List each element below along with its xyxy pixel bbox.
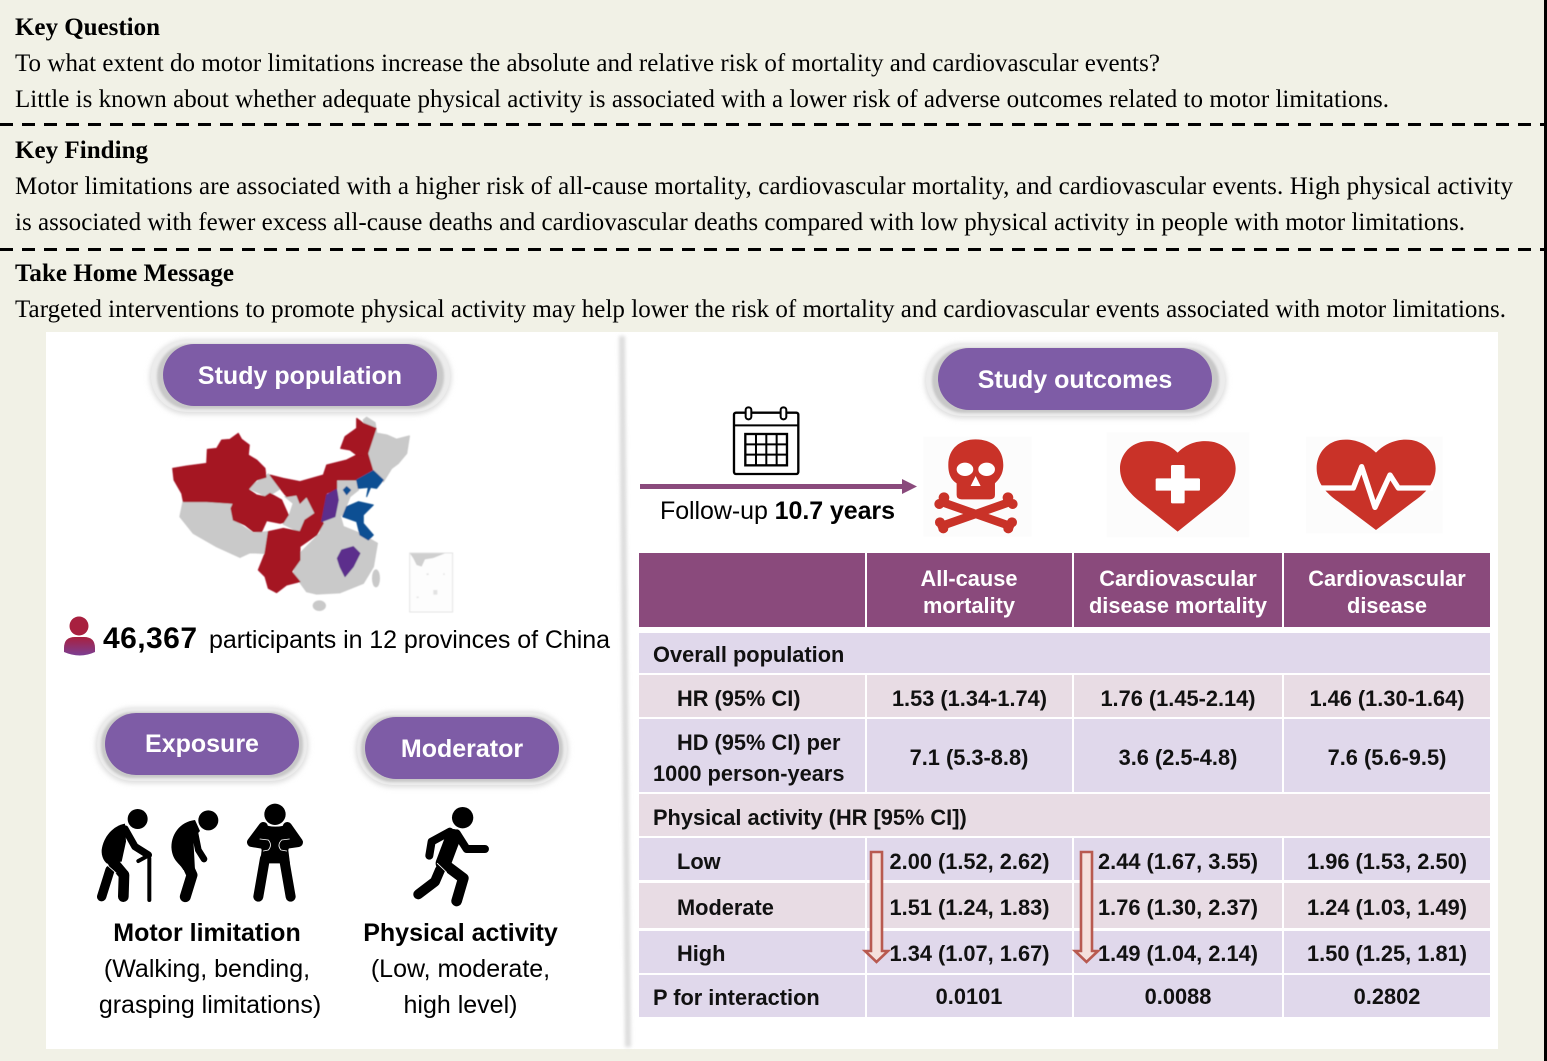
text: grasping limitations: grasping limitations) [99, 991, 321, 1019]
table: outcomes [639, 553, 1490, 1017]
row: HD: 1000 person-years [653, 761, 844, 786]
icon: heart with cross [1107, 432, 1249, 537]
participants description: participants in 12 provinces of China [209, 626, 610, 654]
row: high: High [677, 941, 725, 966]
heading: take home message: Take Home Message [15, 260, 234, 287]
row: HD: 7.1 (5.3-8.8) [910, 745, 1028, 770]
row: overall population [639, 633, 1490, 673]
row: HR [639, 675, 1490, 717]
icon: older people with motor limitations [102, 804, 298, 900]
row: moderate: Moderate [677, 895, 774, 920]
panel: study outcomes [639, 344, 1490, 1017]
row: physical activity heading: Physical activity (HR [95% CI]) [653, 805, 967, 830]
table header: disease mortality [1089, 593, 1267, 618]
row: HD: HD (95% CI) per [677, 730, 841, 755]
row: HR: HR (95% CI) [677, 686, 801, 711]
row: moderate: 1.51 (1.24, 1.83) [890, 895, 1049, 920]
pill: exposure: Exposure [145, 730, 259, 758]
row: overall population: Overall population [653, 642, 844, 667]
table header: mortality [923, 593, 1015, 618]
row: low: Low [677, 849, 721, 874]
pill: study population: Study population [198, 362, 402, 390]
row: high [639, 931, 1490, 973]
table header: All-cause [921, 566, 1017, 591]
label: physical activity: Physical activity [363, 919, 558, 947]
table header: Cardiovascular [1308, 566, 1466, 591]
heading: key question: Key Question [15, 14, 160, 41]
panel: exposure [96, 708, 321, 1019]
row: high: 1.34 (1.07, 1.67) [890, 941, 1049, 966]
row: HD [639, 719, 1490, 792]
section: take home message [15, 260, 1506, 323]
row: p for interaction: P for interaction [653, 985, 820, 1010]
row: p for interaction: 0.0088 [1145, 984, 1211, 1009]
row: high: 1.49 (1.04, 2.14) [1098, 941, 1258, 966]
pill: moderator: Moderator [401, 735, 523, 763]
panel: moderator [356, 712, 568, 1019]
row: low: 1.96 (1.53, 2.50) [1307, 849, 1467, 874]
row: moderate: 1.24 (1.03, 1.49) [1307, 895, 1467, 920]
icon: skull and crossbones [923, 437, 1032, 537]
participants count: 46,367 [103, 622, 197, 655]
row: HR: 1.46 (1.30-1.64) [1309, 686, 1465, 711]
map of China [173, 417, 453, 612]
section: key finding [15, 137, 1514, 236]
label: motor limitation: Motor limitation [113, 919, 301, 947]
icon: heart with pulse [1306, 437, 1443, 533]
row: low: 2.00 (1.52, 2.62) [890, 849, 1049, 874]
pill: study outcomes [925, 344, 1226, 418]
icon: runner [418, 807, 485, 901]
row: high: 1.50 (1.25, 1.81) [1307, 941, 1467, 966]
text: low, moderate: (Low, moderate, [371, 955, 550, 983]
table header [639, 553, 1490, 627]
text: question line 2: Little is known about whether adequate physical activity is associated with a lower risk of adverse outcomes related to motor limitations. [15, 86, 1389, 113]
arrow: follow-up timeline [640, 479, 917, 494]
text: finding line 2: is associated with fewer excess all-cause deaths and cardiovascular deaths compared with low physical activity in people with motor limitations. [15, 209, 1465, 236]
row: HD: 3.6 (2.5-4.8) [1119, 745, 1237, 770]
row: HR: 1.76 (1.45-2.14) [1100, 686, 1256, 711]
row: HR: 1.53 (1.34-1.74) [892, 686, 1047, 711]
text: finding line 1: Motor limitations are associated with a higher risk of all-cause mortality, cardiovascular mortality, and cardiovascular events. High physical activity [15, 173, 1514, 200]
row: low: 2.44 (1.67, 3.55) [1098, 849, 1258, 874]
row: moderate [639, 883, 1490, 928]
text: take home line: Targeted interventions to promote physical activity may help lower the risk of mortality and cardiovascular events associated with motor limitations. [15, 296, 1506, 323]
row: p for interaction: 0.0101 [936, 984, 1002, 1009]
pill: study outcomes: Study outcomes [978, 366, 1172, 394]
row: p for interaction: 0.2802 [1354, 984, 1420, 1009]
pill: study population [150, 340, 451, 414]
row: physical activity heading [639, 794, 1490, 836]
table header: disease [1347, 593, 1427, 618]
text: walking, bending: (Walking, bending, [104, 955, 310, 983]
pill: moderator [356, 712, 568, 787]
section: key question [15, 14, 1389, 113]
text: question line 1: To what extent do motor limitations increase the absolute and relative risk of mortality and cardiovascular events? [15, 50, 1160, 77]
heading: key finding: Key Finding [15, 137, 148, 164]
text: high level: high level) [404, 991, 517, 1019]
row: moderate: 1.76 (1.30, 2.37) [1098, 895, 1258, 920]
table header: Cardiovascular [1099, 566, 1257, 591]
icon: participant [64, 616, 95, 656]
row: low [639, 838, 1490, 880]
arrow: cardiovascular mortality decreasing [1075, 852, 1098, 962]
row: HD: 7.6 (5.6-9.5) [1328, 745, 1446, 770]
arrow: all-cause mortality decreasing [865, 852, 888, 962]
row: p for interaction [639, 975, 1490, 1017]
pill: exposure [96, 708, 308, 783]
label: follow-up duration: Follow-up 10.7 years [660, 497, 895, 525]
panel: study population [64, 340, 610, 656]
icon: calendar [734, 407, 798, 474]
